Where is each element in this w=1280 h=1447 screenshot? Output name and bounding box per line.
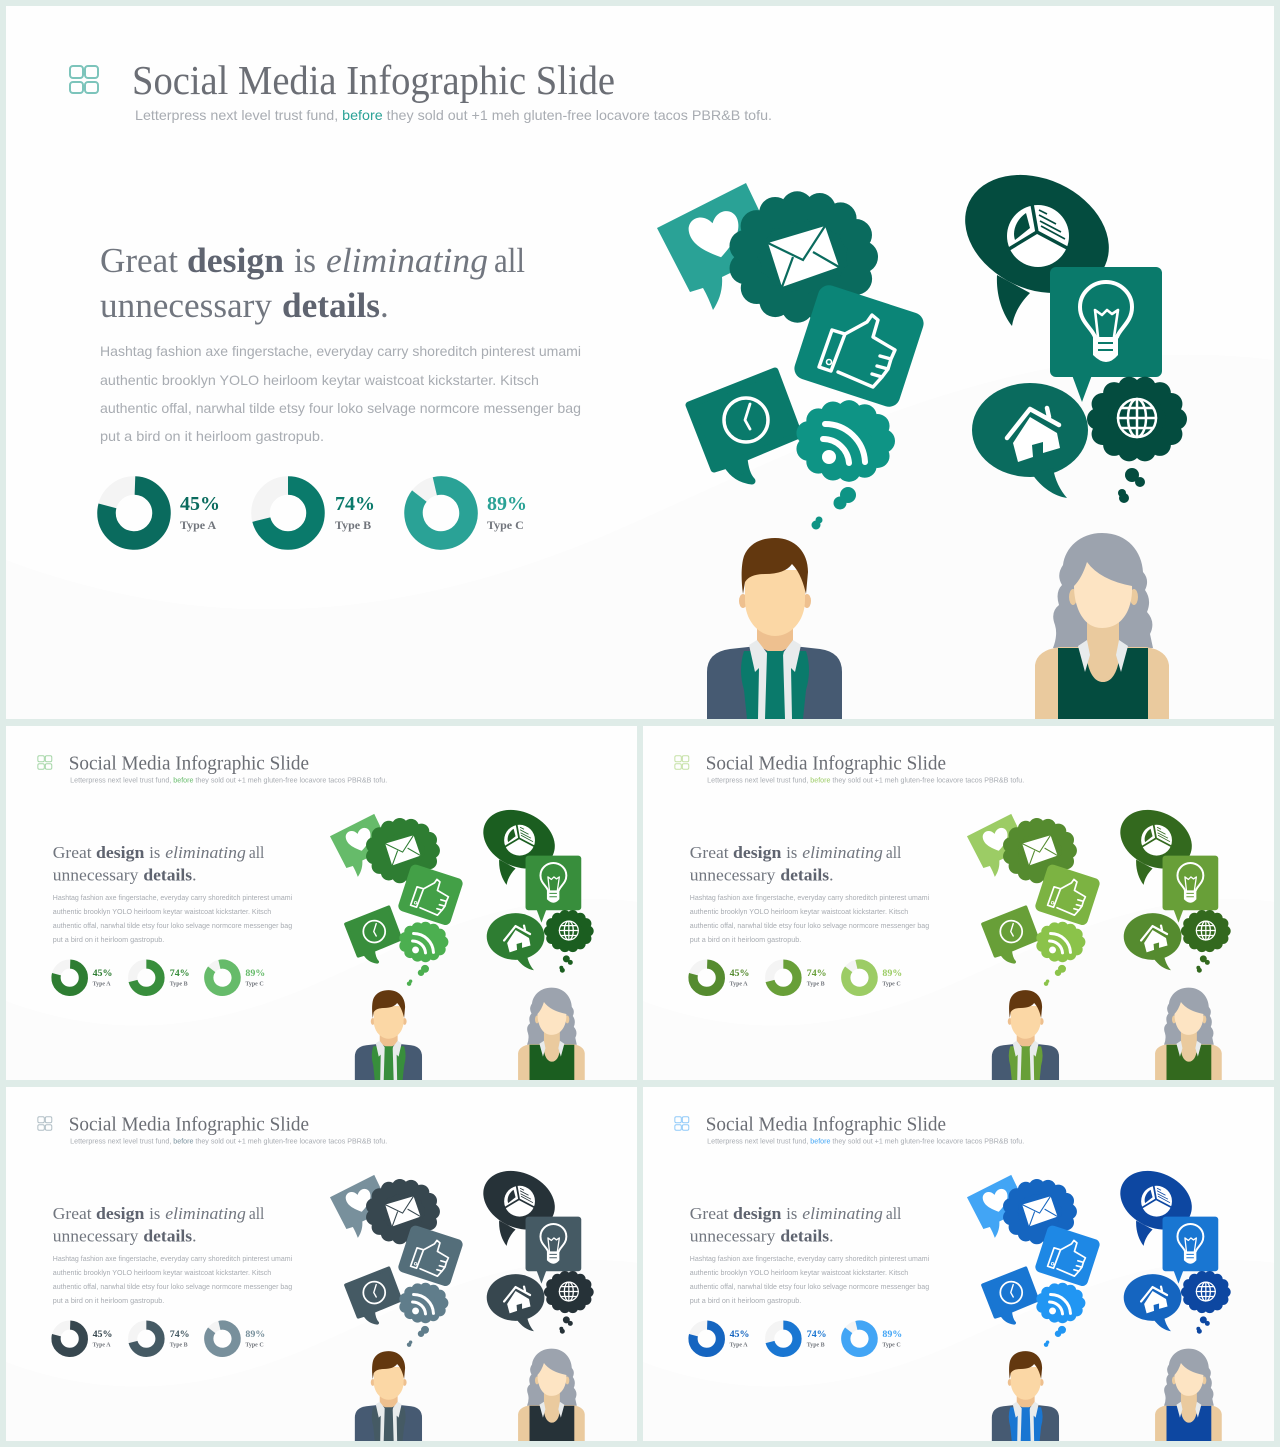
heading: design [187, 241, 284, 280]
donuts and labels: Type C [882, 982, 901, 988]
heading: eliminating [165, 843, 246, 862]
body text [53, 1256, 293, 1305]
body text: Hashtag fashion axe fingerstache, everyday carry shoreditch pinterest umami [53, 895, 293, 902]
heading: . [829, 1226, 833, 1245]
panel: green slide [6, 726, 637, 1080]
heading: Great [53, 843, 92, 862]
heading: details [143, 1226, 192, 1245]
title: Social Media Infographic Slide [69, 753, 309, 775]
body text [690, 1256, 930, 1305]
heading: all [249, 843, 264, 862]
heading: unnecessary [53, 1226, 139, 1245]
figure: man [992, 990, 1059, 1080]
heading [690, 1204, 901, 1245]
body text: put a bird on it heirloom gastropub. [690, 1298, 801, 1305]
donuts and labels [56, 961, 265, 994]
icon cluster: left bubbles [657, 183, 926, 530]
heading: unnecessary [53, 865, 139, 884]
label: Type B: Type B [335, 518, 371, 532]
body text: authentic offal, narwhal tilde etsy four loko selvage normcore messenger bag [53, 1284, 292, 1291]
body text: put a bird on it heirloom gastropub. [690, 937, 801, 944]
subtitle: Letterpress next level trust fund, before they sold out +1 meh gluten-free locavore tacos PBR&B tofu. [135, 107, 772, 123]
icon cluster: left bubbles [967, 814, 1101, 986]
icon: thumbs up bubble [792, 282, 926, 410]
body text: put a bird on it heirloom gastropub. [100, 428, 324, 444]
donuts and labels: Type B [807, 1343, 825, 1349]
heading: details [282, 286, 380, 325]
title: Social Media Infographic Slide [706, 1114, 946, 1136]
body text: authentic offal, narwhal tilde etsy four loko selvage normcore messenger bag [690, 923, 929, 930]
heading: . [829, 865, 833, 884]
donuts and labels: Type B [807, 982, 825, 988]
heading: is [786, 843, 797, 862]
donuts and labels: Type A [93, 982, 111, 988]
donuts and labels: 89% [245, 1329, 265, 1340]
figure: man [355, 1351, 422, 1441]
icon: clock bubble [689, 371, 799, 481]
donuts and labels: 45% [93, 1329, 112, 1340]
donuts and labels: 74% [170, 968, 190, 979]
donuts and labels: 45% [730, 968, 749, 979]
heading: . [380, 286, 389, 325]
icon cluster: right bubbles [1111, 799, 1225, 973]
donuts and labels: Type C [245, 982, 264, 988]
donuts and labels: Type B [170, 982, 188, 988]
panel: lime slide [643, 726, 1274, 1080]
icon cluster: left bubbles [330, 814, 464, 986]
icon cluster: right bubbles [474, 799, 588, 973]
icon: grid [38, 1117, 52, 1130]
body text: authentic offal, narwhal tilde etsy four loko selvage normcore messenger bag [53, 923, 292, 930]
label: Type A: Type A [180, 518, 216, 532]
icon: pie chart bubble [946, 152, 1128, 326]
heading: details [143, 865, 192, 884]
label: Type A: 45% [180, 493, 220, 515]
heading [53, 1204, 264, 1245]
donuts and labels [693, 1322, 902, 1355]
figure: woman [1155, 988, 1222, 1080]
subtitle: Letterpress next level trust fund, before they sold out +1 meh gluten-free locavore tacos PBR&B tofu. [707, 1139, 1024, 1146]
title: Social Media Infographic Slide [706, 753, 946, 775]
icon: grid [70, 66, 98, 93]
heading: . [192, 865, 196, 884]
label: Type C: Type C [487, 518, 524, 532]
heading: all [249, 1204, 264, 1223]
label: Type C: 89% [487, 493, 527, 515]
heading: unnecessary [690, 1226, 776, 1245]
figure: woman [518, 1349, 585, 1441]
heading [100, 241, 525, 325]
body text: authentic brooklyn YOLO heirloom keytar waistcoat kickstarter. Kitsch [690, 1270, 908, 1277]
subtitle: Letterpress next level trust fund, before they sold out +1 meh gluten-free locavore tacos PBR&B tofu. [70, 1139, 387, 1146]
body text: Hashtag fashion axe fingerstache, everyday carry shoreditch pinterest umami [690, 1256, 930, 1263]
body text: authentic offal, narwhal tilde etsy four loko selvage normcore messenger bag [690, 1284, 929, 1291]
heading: Great [690, 1204, 729, 1223]
heading: is [786, 1204, 797, 1223]
icon: thought dots [812, 487, 856, 530]
donut: Type B [260, 486, 316, 540]
icon cluster: right bubbles [474, 1160, 588, 1334]
heading: unnecessary [100, 286, 272, 325]
body text [100, 343, 581, 444]
body text [53, 895, 293, 944]
donuts and labels: 89% [882, 968, 902, 979]
heading: eliminating [802, 843, 883, 862]
donuts and labels: Type A [730, 982, 748, 988]
figure: woman [1155, 1349, 1222, 1441]
heading [53, 843, 264, 884]
body text: put a bird on it heirloom gastropub. [53, 1298, 164, 1305]
donuts and labels: 45% [93, 968, 112, 979]
heading: eliminating [165, 1204, 246, 1223]
heading: is [149, 1204, 160, 1223]
body text: authentic brooklyn YOLO heirloom keytar waistcoat kickstarter. Kitsch [100, 372, 539, 388]
icon: rss badge [807, 412, 883, 470]
heading: design [96, 843, 145, 862]
body text [690, 895, 930, 944]
icon: grid [38, 756, 52, 769]
donuts and labels: Type B [170, 1343, 188, 1349]
icon: envelope badge [744, 207, 862, 307]
donut: Type A [106, 485, 162, 541]
body text: authentic brooklyn YOLO heirloom keytar waistcoat kickstarter. Kitsch [53, 1270, 271, 1277]
panel: grey slide [6, 1087, 637, 1441]
heading: design [733, 1204, 782, 1223]
heading: details [780, 865, 829, 884]
donuts and labels [56, 1322, 265, 1355]
icon: house bubble [972, 383, 1088, 498]
heading: Great [53, 1204, 92, 1223]
body text: Hashtag fashion axe fingerstache, everyday carry shoreditch pinterest umami [690, 895, 930, 902]
heading: design [96, 1204, 145, 1223]
subtitle: Letterpress next level trust fund, before they sold out +1 meh gluten-free locavore tacos PBR&B tofu. [70, 778, 387, 785]
heading: all [886, 843, 901, 862]
body text: authentic offal, narwhal tilde etsy four loko selvage normcore messenger bag [100, 400, 581, 416]
heading: all [886, 1204, 901, 1223]
figure: man [355, 990, 422, 1080]
label: Type A [180, 493, 220, 532]
figure: man [707, 538, 842, 719]
figure: man [992, 1351, 1059, 1441]
panel: blue slide [643, 1087, 1274, 1441]
donuts and labels: 45% [730, 1329, 749, 1340]
icon cluster: left bubbles [330, 1175, 464, 1347]
heading: all [494, 241, 525, 280]
icon: heart bubble [657, 183, 778, 310]
icon: grid [675, 756, 689, 769]
donuts and labels: 74% [807, 968, 827, 979]
body text: Hashtag fashion axe fingerstache, everyday carry shoreditch pinterest umami [53, 1256, 293, 1263]
donuts and labels: Type A [730, 1343, 748, 1349]
heading: Great [100, 241, 178, 280]
panel: main teal slide [6, 6, 1274, 719]
donuts and labels [693, 961, 902, 994]
title: Social Media Infographic Slide [69, 1114, 309, 1136]
icon cluster: left bubbles [967, 1175, 1101, 1347]
donuts and labels: 89% [245, 968, 265, 979]
icon: globe badge [1098, 387, 1176, 451]
donuts and labels: Type C [882, 1343, 901, 1349]
body text: authentic brooklyn YOLO heirloom keytar waistcoat kickstarter. Kitsch [690, 909, 908, 916]
heading: eliminating [326, 241, 488, 280]
heading: eliminating [802, 1204, 883, 1223]
icon cluster: right bubbles [1111, 1160, 1225, 1334]
donuts and labels: 74% [170, 1329, 190, 1340]
heading [690, 843, 901, 884]
figure: woman [518, 988, 585, 1080]
icon: light bulb bubble [1050, 267, 1162, 402]
label: Type B: 74% [335, 493, 375, 515]
donut: Type C [408, 480, 474, 546]
icon: grid [675, 1117, 689, 1130]
body text: put a bird on it heirloom gastropub. [53, 937, 164, 944]
body text: authentic brooklyn YOLO heirloom keytar waistcoat kickstarter. Kitsch [53, 909, 271, 916]
donuts and labels: 89% [882, 1329, 902, 1340]
body text: Hashtag fashion axe fingerstache, everyday carry shoreditch pinterest umami [100, 343, 581, 359]
donuts and labels: Type A [93, 1343, 111, 1349]
heading: details [780, 1226, 829, 1245]
heading: Great [690, 843, 729, 862]
figure: woman [1035, 533, 1169, 719]
heading: . [192, 1226, 196, 1245]
subtitle: Letterpress next level trust fund, before they sold out +1 meh gluten-free locavore tacos PBR&B tofu. [707, 778, 1024, 785]
heading: design [733, 843, 782, 862]
icon: thought dots [1118, 468, 1145, 503]
label: Type B [335, 493, 375, 532]
icon cluster: right bubbles [946, 152, 1176, 503]
title: Social Media Infographic Slide [132, 57, 615, 103]
label: Type C [487, 493, 527, 532]
heading: is [294, 241, 316, 280]
donuts and labels: Type C [245, 1343, 264, 1349]
heading: unnecessary [690, 865, 776, 884]
heading: is [149, 843, 160, 862]
donuts and labels: 74% [807, 1329, 827, 1340]
